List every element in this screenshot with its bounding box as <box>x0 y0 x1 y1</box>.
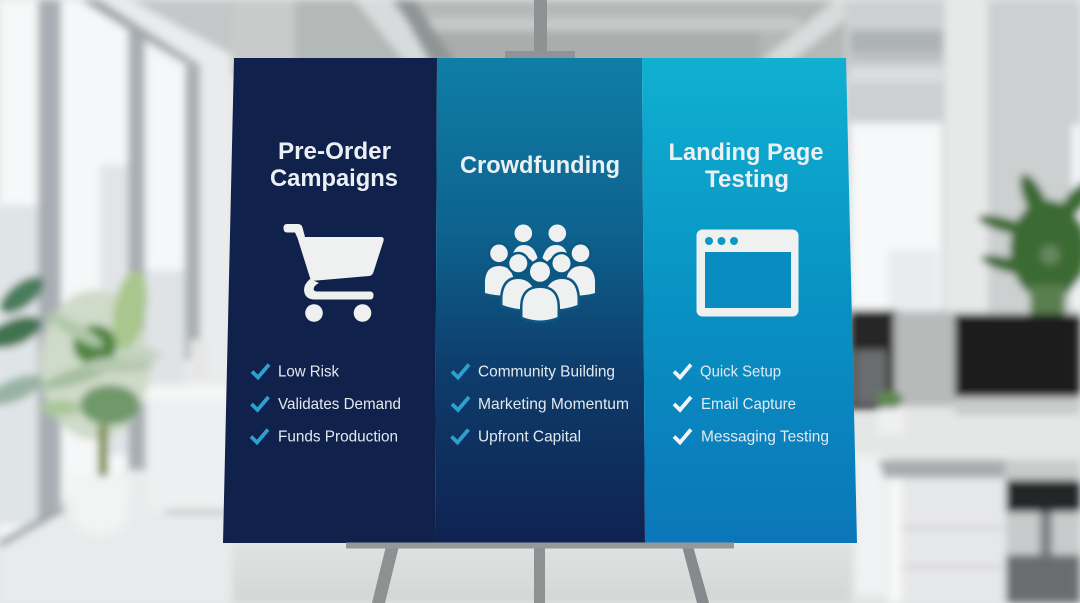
icon: group of people <box>485 224 595 320</box>
icon: shopping cart <box>284 224 384 322</box>
list: crowdfunding benefits: Marketing Momentum <box>478 396 629 413</box>
list: pre-order benefits: Low Risk <box>278 364 340 380</box>
list: crowdfunding benefits: Community Building <box>478 364 615 380</box>
heading: pre-order campaigns: Pre-Order <box>278 138 391 165</box>
list: landing page benefits: Quick Setup <box>700 364 781 380</box>
heading: landing page testing: Landing Page <box>668 139 824 166</box>
right plant <box>976 170 1080 315</box>
panel: pre-order campaigns <box>223 58 437 543</box>
list: pre-order benefits <box>251 364 401 446</box>
list: landing page benefits: Email Capture <box>701 396 796 413</box>
poster board <box>223 58 857 543</box>
easel right leg <box>682 546 709 603</box>
right wall and window <box>845 0 1080 315</box>
monitors <box>850 310 898 410</box>
easel tray <box>346 542 734 548</box>
easel left leg <box>372 546 399 603</box>
floor <box>0 512 232 603</box>
easel <box>372 0 709 603</box>
panel: landing page testing <box>642 58 857 543</box>
icon: browser window <box>696 230 798 316</box>
list: crowdfunding benefits <box>452 364 629 446</box>
easel centre leg <box>534 546 545 603</box>
heading: pre-order campaigns: Campaigns <box>270 165 398 192</box>
list: crowdfunding benefits: Upfront Capital <box>478 428 581 446</box>
desk left <box>140 385 230 401</box>
list: pre-order benefits: Funds Production <box>278 428 398 446</box>
easel top post <box>534 0 547 54</box>
panel: crowdfunding <box>435 58 645 543</box>
desk and cabinets <box>855 415 1080 460</box>
left plant <box>0 268 162 535</box>
ceiling <box>200 0 860 75</box>
list: landing page benefits <box>674 364 829 446</box>
easel top clamp <box>505 51 575 59</box>
left side wall and windows <box>0 0 232 603</box>
list: pre-order benefits: Validates Demand <box>278 396 401 413</box>
heading: crowdfunding: Crowdfunding <box>460 152 620 179</box>
heading: landing page testing: Testing <box>705 166 789 193</box>
list: landing page benefits: Messaging Testing <box>701 428 829 446</box>
